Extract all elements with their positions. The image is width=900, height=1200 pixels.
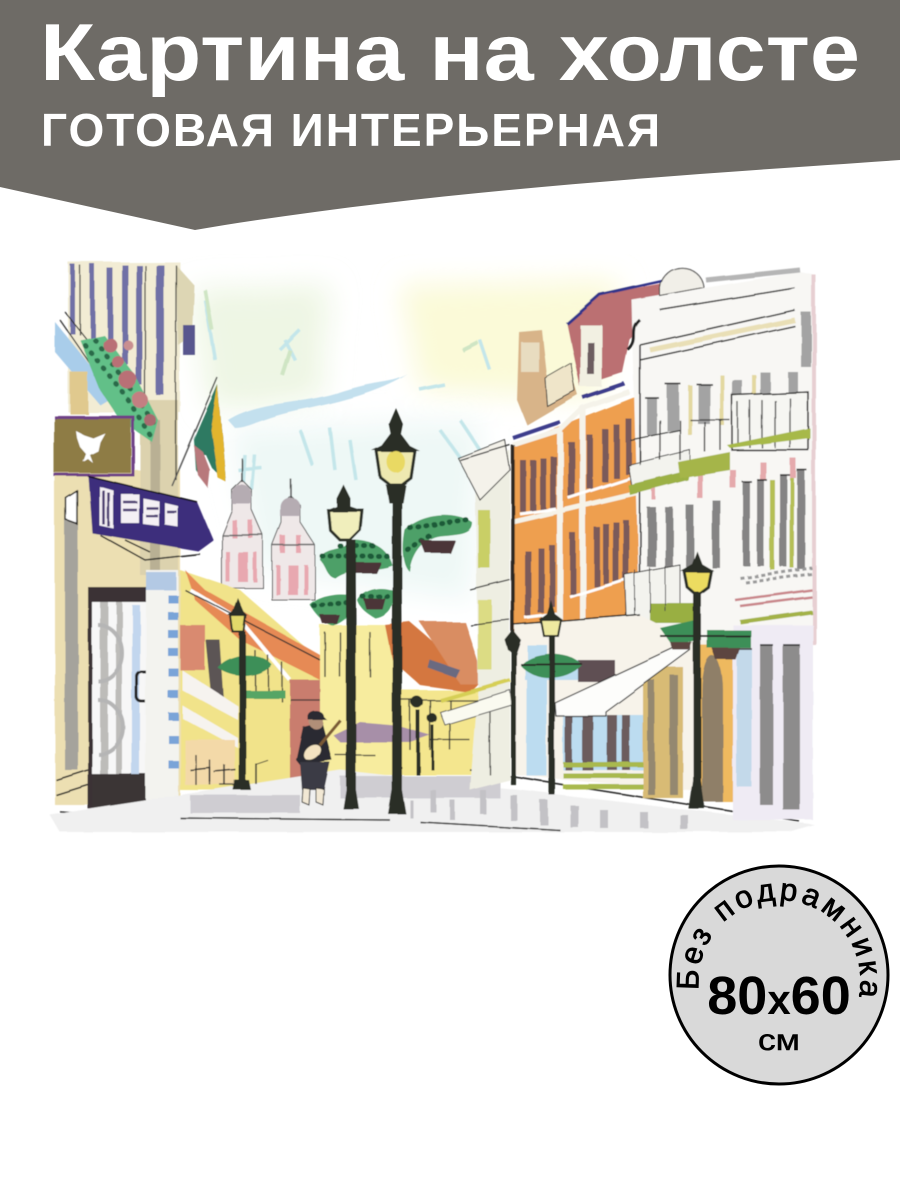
- glass shop door: [56, 587, 165, 818]
- blue tiled column: [146, 570, 178, 802]
- distant lamps: [411, 696, 437, 775]
- middle building outlines: [185, 590, 490, 785]
- flower box: [80, 335, 158, 442]
- purple awning: [88, 476, 213, 560]
- right lamp: [680, 551, 714, 809]
- white side building far: [458, 440, 510, 790]
- small lamp: [228, 598, 251, 790]
- second lamp: [326, 484, 362, 809]
- lower window columns: [647, 470, 805, 569]
- hanging flower baskets: [218, 515, 751, 698]
- title: Картина на холсте: [40, 8, 860, 98]
- subtitle: ГОТОВАЯ ИНТЕРЬЕРНАЯ: [41, 104, 660, 156]
- shop sign with bird: [54, 417, 133, 475]
- middle yellow buildings: [180, 570, 500, 790]
- badge size: 80х60: [707, 966, 851, 1026]
- mid right lamp: [539, 600, 563, 795]
- big lamp: [372, 408, 420, 814]
- size badge: [668, 864, 890, 1086]
- sky: [190, 280, 620, 600]
- far right lamp: [505, 630, 521, 785]
- balconies: [625, 392, 812, 625]
- church towers: [222, 458, 315, 600]
- header banner: [0, 0, 900, 230]
- ground floor shops: [513, 615, 813, 820]
- badge unit: см: [758, 1024, 800, 1057]
- ornate white building: [628, 268, 816, 650]
- lamp bracket: [520, 636, 750, 664]
- flag: [172, 378, 226, 488]
- cafe furniture: [190, 760, 268, 785]
- orange building: [513, 279, 677, 783]
- street lamps: [228, 408, 714, 814]
- painting: street scene: [50, 262, 816, 832]
- awnings: [440, 640, 690, 725]
- badge curved label: Без подрамника: [676, 882, 878, 998]
- left building: [55, 262, 195, 805]
- guitarist: [296, 711, 340, 805]
- street: [50, 770, 815, 832]
